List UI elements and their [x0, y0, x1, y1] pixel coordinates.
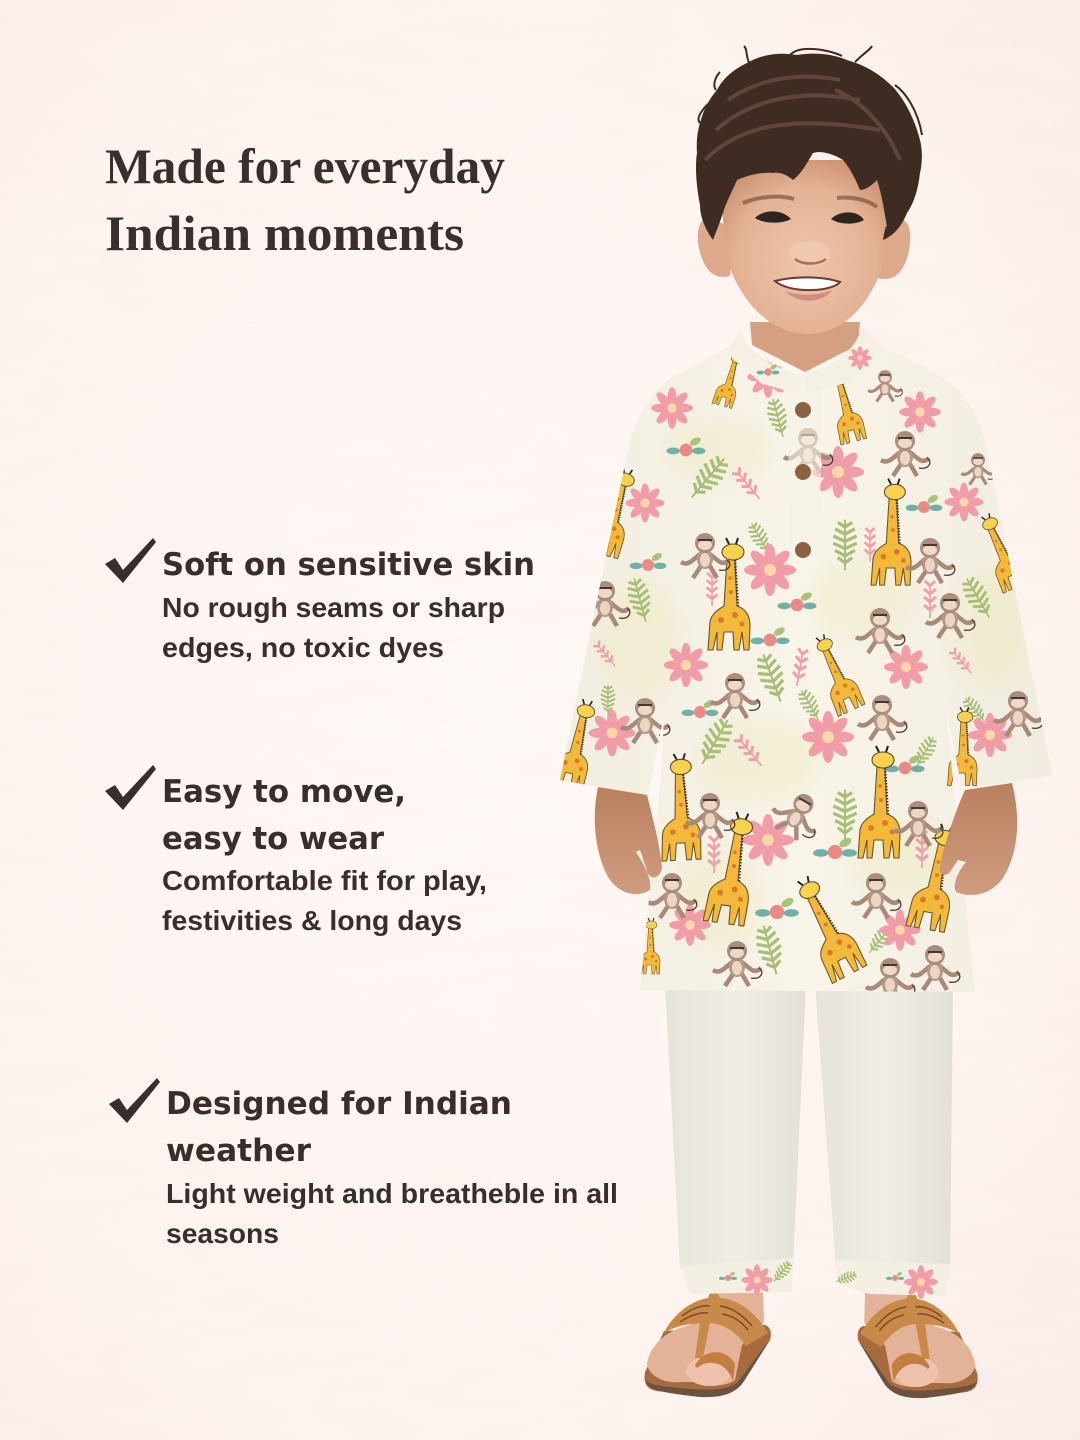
feature text 1: edges, no toxic dyes [162, 632, 444, 663]
placket and buttons [787, 378, 822, 562]
feature: easy to move [105, 765, 487, 936]
icon: check mark 3 [109, 1078, 160, 1123]
eyebrows [743, 197, 877, 207]
feature heading 3 [166, 1086, 512, 1169]
feature heading 1: Soft on sensitive skin [162, 547, 535, 583]
icon: check mark 1 [105, 538, 156, 583]
kurta with animal print [550, 345, 1052, 1003]
illustration: smiling boy in printed kurta [550, 46, 1052, 1398]
feature text 2: Comfortable fit for play, [162, 865, 487, 896]
hair [696, 46, 922, 240]
title: Indian moments [105, 205, 464, 261]
feature heading 2: easy to wear [162, 821, 385, 857]
feature text 1 [162, 592, 505, 663]
feature heading 3: weather [166, 1133, 312, 1169]
feature text 1: No rough seams or sharp [162, 592, 505, 623]
feature: soft on sensitive skin [105, 538, 535, 663]
eyes [755, 211, 791, 223]
feature: designed for Indian weather [109, 1078, 618, 1249]
nose [789, 241, 831, 267]
feature heading 2: Easy to move, [162, 774, 406, 810]
feature heading 2 [162, 774, 406, 857]
pants [665, 985, 953, 1299]
mouth [775, 277, 840, 290]
feature text 3: Light weight and breatheble in all [166, 1178, 618, 1209]
title: Made for everyday [105, 138, 505, 194]
title [105, 138, 505, 261]
feature text 2 [162, 865, 487, 936]
head and face [698, 160, 910, 334]
sandals and feet [645, 1284, 978, 1398]
feature text 2: festivities & long days [162, 905, 462, 936]
feature text 3 [166, 1178, 618, 1249]
icon: check mark 2 [105, 765, 156, 810]
feature text 3: seasons [166, 1218, 279, 1249]
hands [595, 783, 1017, 895]
neck and collar [726, 322, 885, 394]
feature heading 3: Designed for Indian [166, 1086, 512, 1122]
